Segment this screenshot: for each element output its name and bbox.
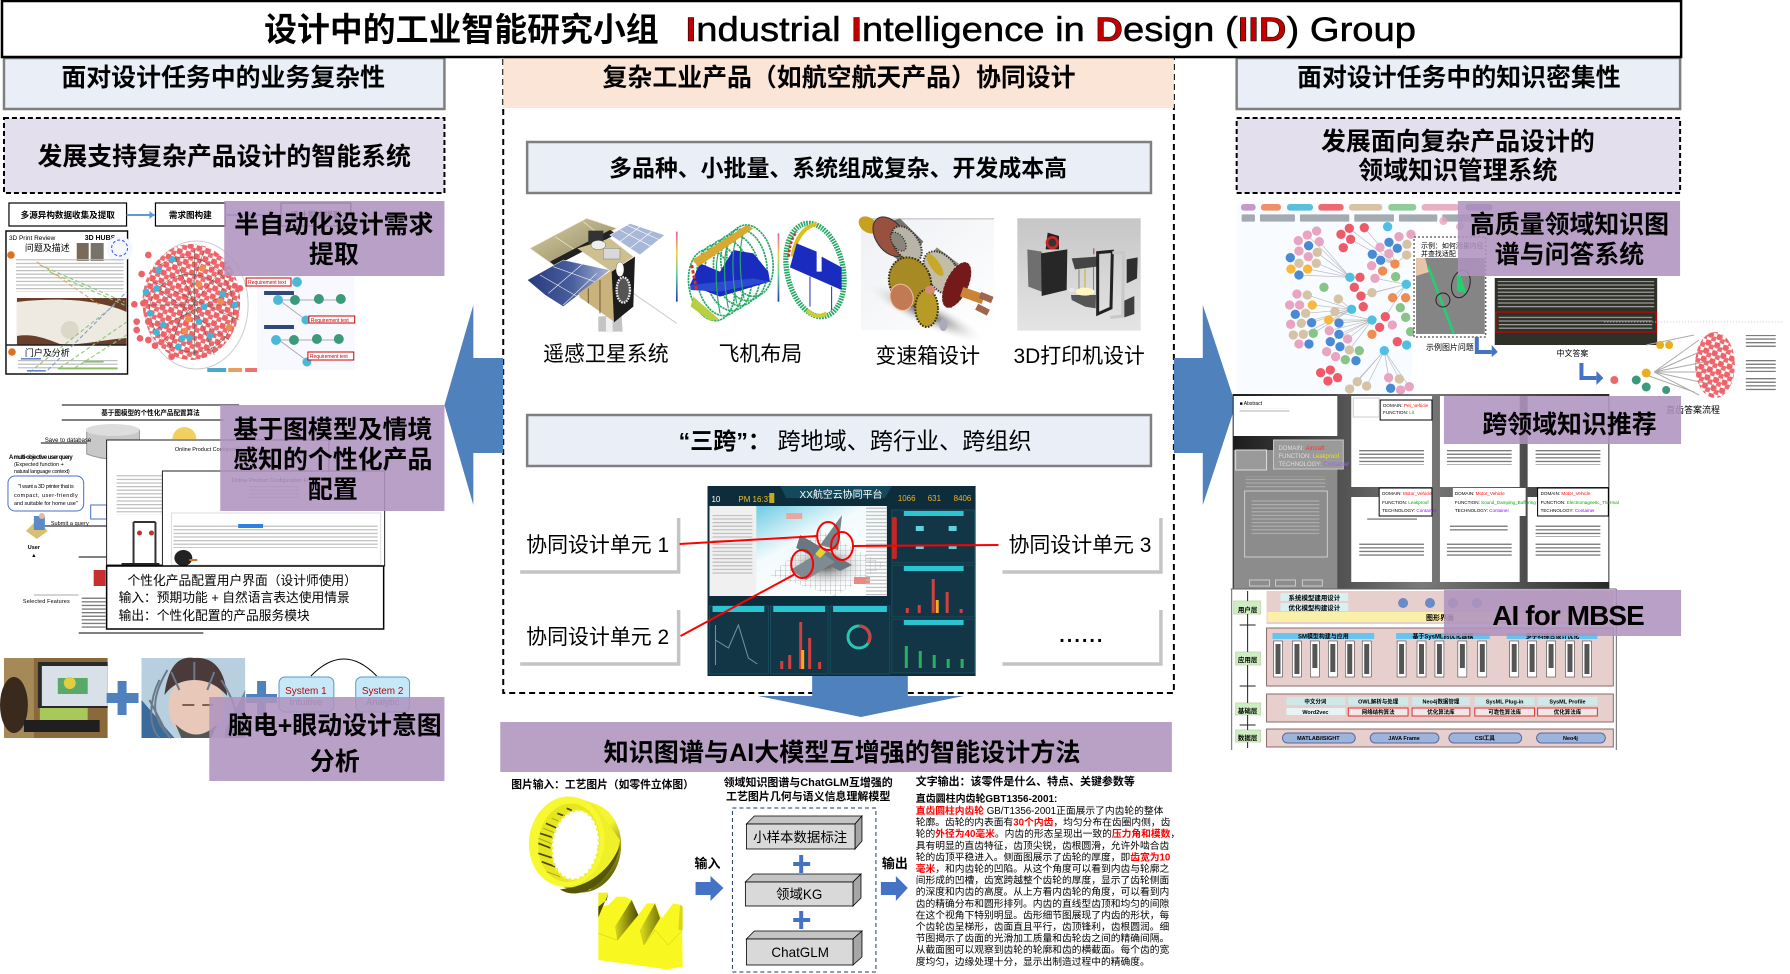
figure: graph-based configuration algorithm: and suitable for home use" — [14, 501, 78, 507]
layer: platform services: Word2vec — [1302, 710, 1328, 716]
caption: KG and ChatGLM model: 领域知识图谱与ChatGLM互增强的 — [724, 775, 893, 789]
captions: product examples: 遥感卫星系统 — [543, 343, 669, 366]
figure: requirement extraction flow: 多源异构数据收集及提取 — [21, 209, 115, 220]
block: domain KG — [745, 874, 861, 906]
layer: interface: 系统模型建用设计 — [1289, 593, 1341, 602]
arrow: output: 输出 — [882, 856, 908, 871]
arrow: answer to recommendation — [1581, 363, 1603, 385]
photo: EEG cap — [142, 658, 245, 738]
box: three-cross collaboration: “三跨”： 跨地域、跨行业、跨组织 — [679, 428, 1032, 454]
dashboard: collaboration platform: 1066 — [898, 494, 916, 503]
panel: center dashed frame — [503, 57, 1174, 693]
icon: plus — [246, 681, 277, 715]
figure: graph-based configuration algorithm — [8, 405, 239, 633]
overlay label: EEG and eye tracking intent analysis: 脑电+眼动设计意图 — [228, 711, 442, 740]
figure: graph-based configuration algorithm: Selected Features — [23, 599, 70, 605]
panel: LLM answer — [1495, 278, 1657, 358]
title: 设计中的工业智能研究小组 — [264, 11, 659, 48]
overlay label: graph and context-aware configuration — [220, 405, 444, 511]
chart: fan knowledge graph: 直齿答案流程 — [1666, 404, 1720, 415]
screen: left grey slide: ■ Abstract — [1240, 401, 1263, 407]
callouts: domain function technology tags: DOMAIN: Motor_Vehicle — [1455, 491, 1505, 496]
box: three-cross collaboration — [527, 415, 1151, 466]
box: product characteristics: 多品种、小批量、系统组成复杂、开发成本高 — [609, 155, 1067, 181]
screenshot: online product configurator back window: Online Product Configuration Form — [175, 447, 260, 453]
callout lines and circles on aircraft — [680, 522, 998, 636]
diagram: dual system: Intuitive — [290, 697, 322, 708]
layer: platform services: 网络结构算法 — [1362, 708, 1395, 716]
arrow down to methods — [758, 676, 964, 717]
diagram: MBSE architecture: 基础层 — [1238, 706, 1258, 715]
text block: generated description: 轮的外径为40毫米。内齿的形态呈现出一致的压力角和模数， — [916, 827, 1180, 840]
icon: 3D printer — [1017, 218, 1141, 331]
heading: left task complexity — [4, 58, 444, 109]
figure: requirement extraction flow: 问题及描述 — [25, 242, 70, 253]
layer: application: 基于SysML的优化建模 — [1412, 632, 1473, 641]
icon: plus — [107, 681, 139, 715]
heading: left task complexity: 面对设计任务中的业务复杂性 — [61, 64, 385, 92]
text block: generated description: 轮廓。齿轮的内表面有30个内齿，均匀分布在齿圈内侧，齿 — [916, 816, 1171, 829]
block: ChatGLM — [746, 931, 862, 965]
chart: domain knowledge graph — [1237, 203, 1492, 395]
panel: model stack — [732, 808, 876, 972]
arrow: input: 输入 — [695, 856, 720, 871]
layer: platform services — [1267, 694, 1613, 722]
text block: generated description: 在这个视角下特别明显。齿形细节图展现了内齿的形状，每 — [916, 908, 1169, 921]
heading: right knowledge intensity — [1237, 58, 1680, 109]
callouts: domain function technology tags: TECHNOLOGY: Container — [1541, 508, 1595, 513]
arrow: input — [695, 856, 723, 901]
heading: right knowledge intensity: 面对设计任务中的知识密集性 — [1297, 63, 1621, 92]
overlay label: knowledge graph and QA system: 谱与问答系统 — [1495, 241, 1644, 269]
diagram: dual system: System 1 — [285, 686, 327, 697]
diagram: MBSE architecture: 用户层 — [1238, 605, 1258, 614]
figure: requirement extraction flow: 3D HUBS — [85, 235, 116, 242]
unit: collaborative design unit 2 — [519, 610, 681, 666]
text block: generated description: 间形成的凹槽，齿宽跨越整个齿轮的厚度，显示了齿轮侧面 — [916, 874, 1169, 887]
overlay label: AI for MBSE — [1444, 590, 1681, 636]
screen: left grey slide: FUNCTION: Leakproof — [1279, 454, 1339, 460]
chart: requirement sub-graphs: Requirement text — [248, 280, 287, 286]
caption: KG and ChatGLM model — [724, 775, 893, 803]
layer: interface — [1267, 591, 1613, 624]
text block: generated description: 齿的精确分布和圆形排列。内齿的直线型齿顶和均匀的间隙 — [916, 897, 1169, 910]
figure: graph-based configuration algorithm: A multi-objective user query — [9, 455, 73, 461]
overlay label: knowledge graph and QA system: 高质量领域知识图 — [1470, 211, 1669, 239]
callouts: domain function technology tags: DOMAIN: Pet_Vehicle — [1383, 403, 1429, 408]
callouts: domain function technology tags: DOMAIN: Motor_Vehicle — [1382, 491, 1432, 496]
caption: image input: 图片输入：工艺图片（如零件立体图） — [511, 778, 694, 791]
overlay label: semi-automatic requirement extraction — [224, 201, 444, 276]
icon: gearbox — [855, 211, 994, 354]
layer: application: 多学科综合设计优化 — [1526, 632, 1579, 641]
text block: generated description: 轮的齿顶平稳进入。侧面图展示了齿轮的厚度，即齿宽为10 — [916, 850, 1171, 863]
dashboard: collaboration platform: XX航空云协同平台 — [800, 488, 883, 501]
heading: center collaborative design — [503, 57, 1174, 108]
figure: graph-based configuration algorithm: compact, user-friendly — [14, 493, 78, 499]
layer: application — [1267, 628, 1613, 686]
chart: requirement sub-graphs: Requirement text — [310, 354, 348, 360]
text block: generated description: 毫米，和内齿轮的凹陷。从这个角度可以看到内齿与轮廓之 — [916, 862, 1169, 875]
callouts: domain function technology tags: FUNCTION: Lit — [1383, 410, 1415, 415]
captions: product examples: 3D打印机设计 — [1014, 345, 1145, 368]
heading: center collaborative design: 复杂工业产品（如航空航天产品）协同设计 — [603, 64, 1076, 92]
unit: more units: ...... — [1059, 625, 1104, 647]
icon: yellow internal gear — [523, 792, 627, 897]
callouts: domain function technology tags: TECHNOLOGY: Container — [1455, 508, 1509, 513]
panel: left intelligent systems goal — [4, 118, 444, 193]
unit: collaborative design unit 2: 协同设计单元 2 — [526, 626, 669, 649]
figure: graph-based configuration algorithm: Save to database — [45, 438, 92, 444]
panel: right knowledge management goal — [1237, 118, 1680, 193]
block: small-sample annotation: 小样本数据标注 — [753, 830, 847, 845]
screenshot: online product configurator front window: Online Product Configuration Form — [232, 478, 317, 484]
heading: KG and LLM method: 知识图谱与AI大模型互增强的智能设计方法 — [604, 738, 1080, 767]
caption box: configuration interface — [107, 566, 384, 629]
title: Industrial Intelligence in Design ( IID) Group — [686, 11, 1416, 49]
icon: plus — [793, 911, 810, 929]
diagram: dual system — [279, 659, 410, 712]
text block: generated description: 的深度和内齿的高度。从上方看内齿轮的角度，可以看到内 — [916, 885, 1169, 898]
layer: data and tools: MATLAB/ISIGHT — [1297, 736, 1340, 742]
layer: interface: 优化模型构建设计 — [1289, 603, 1341, 612]
layer: platform services: 优化算法库 — [1554, 708, 1582, 716]
screenshot: online product configurator back window — [107, 440, 329, 565]
figure: graph-based configuration algorithm: "I want a 3D printer that is — [18, 484, 74, 490]
box: product characteristics — [527, 142, 1151, 193]
text block: generated description: 具有明显的直齿特征，齿顶尖锐，齿根圆滑，允许外啮合齿 — [916, 839, 1169, 852]
chart: requirement sub-graphs: Requirement text — [311, 318, 349, 324]
screen: left grey slide: TECHNOLOGY: Container — [1279, 462, 1349, 468]
screen: left grey slide: DOMAIN: Aircraft — [1279, 446, 1325, 452]
dashboard: collaboration platform: 8406 — [954, 494, 972, 503]
text block: generated description: 从截面图可以观察到齿轮的轮廓和齿的横截面。每个齿的宽 — [916, 943, 1169, 956]
diagram: dual system: System 2 — [362, 686, 404, 697]
layer: platform services: OWL解析与处理 — [1358, 697, 1399, 706]
figure: graph-based configuration algorithm: natural language context) — [14, 469, 70, 475]
overlay label: knowledge graph and QA system — [1458, 201, 1680, 276]
callouts: domain function technology tags: FUNCTION: Electromagnetic_Thermal — [1541, 500, 1619, 505]
text block: generated description: 直齿圆柱内齿轮 GB/T1356-2001正面展示了内齿轮的整体 — [916, 804, 1164, 817]
panel: right knowledge management goal: 领域知识管理系统 — [1358, 157, 1558, 185]
chart: requirement knowledge graph — [131, 241, 257, 372]
screenshot: online product configurator front window — [162, 471, 385, 566]
figure: query photo: 并查找适配 — [1421, 249, 1456, 258]
figure: requirement extraction flow: 设计需求提取 — [290, 209, 342, 220]
overlay label: graph and context-aware configuration: 感知的个性化产品 — [233, 445, 432, 474]
left arrow — [444, 305, 503, 505]
layer: data and tools — [1267, 729, 1613, 747]
dashboard: collaboration platform — [708, 486, 976, 676]
chart: requirement sub-graphs — [246, 272, 355, 370]
dashboard: collaboration platform: PM 16:37 — [738, 495, 773, 504]
text block: generated description — [916, 774, 1180, 968]
unit: collaborative design unit 3 — [1001, 518, 1163, 574]
figure: graph-based configuration algorithm: (Expected function + — [14, 462, 64, 468]
unit: collaborative design unit 1: 协同设计单元 1 — [526, 534, 669, 557]
layer: interface: 图形界面 — [1426, 613, 1454, 622]
diagram: MBSE architecture: 应用层 — [1238, 655, 1258, 664]
figure: requirement extraction flow: 门户及分析 — [25, 347, 70, 358]
caption box: configuration interface: 输入：预期功能 + 自然语言表达使用情景 — [119, 590, 350, 605]
overlay label: EEG and eye tracking intent analysis — [209, 697, 444, 781]
callouts: domain function technology tags: TECHNOLOGY: Container — [1382, 508, 1437, 513]
text block: generated description: 直齿圆柱内齿轮GBT1356-2001: — [916, 792, 1057, 805]
caption box: configuration interface: 个性化产品配置用户界面（设计师使用） — [128, 573, 357, 588]
text block: generated description: 节图揭示了齿面的光滑加工质量和齿轮齿之间的精确间隔。 — [916, 932, 1169, 945]
panel: right knowledge management goal: 发展面向复杂产品设计的 — [1321, 128, 1595, 156]
arrow: graph to answer — [1477, 337, 1498, 357]
icon: plus — [793, 855, 810, 873]
screen: result pages — [1351, 396, 1608, 582]
title — [2, 1, 1681, 57]
caption box: configuration interface: 输出：个性化配置的产品服务模块 — [119, 608, 310, 623]
layer: application: SM模型构建与应用 — [1298, 632, 1349, 641]
layer: platform services: 优化算法库 — [1427, 708, 1455, 716]
panel: cross-domain recommendation screens — [1233, 394, 1619, 589]
panel: left intelligent systems goal: 发展支持复杂产品设计的智能系统 — [38, 143, 411, 171]
captions: product examples: 飞机布局 — [718, 343, 802, 366]
callouts: domain function technology tags: FUNCTION: Leakproof — [1382, 500, 1429, 505]
overlay label: graph and context-aware configuration: 配置 — [308, 476, 358, 504]
figure: requirement extraction flow — [6, 203, 351, 374]
overlay label: cross-domain knowledge recommendation — [1444, 396, 1681, 444]
layer: data and tools: CSI工具 — [1475, 735, 1495, 742]
overlay label: AI for MBSE: AI for MBSE — [1492, 600, 1645, 631]
unit: more units — [1001, 610, 1163, 666]
dashboard: collaboration platform: 10 — [712, 495, 721, 504]
right arrow — [1174, 305, 1236, 505]
overlay label: cross-domain knowledge recommendation: 跨领域知识推荐 — [1482, 411, 1657, 439]
icon: aircraft structure simulation — [676, 218, 852, 324]
figure: requirement extraction flow: 需求图构建 — [169, 209, 212, 220]
unit: collaborative design unit 1 — [519, 518, 681, 574]
captions: product examples — [543, 343, 1145, 368]
figure: graph-based configuration algorithm: User — [28, 545, 41, 551]
block: domain KG: 领域KG — [776, 887, 822, 902]
overlay label: semi-automatic requirement extraction: 提取 — [309, 241, 359, 269]
figure: query photo: 示例图片问题 — [1426, 342, 1474, 352]
chart: fan knowledge graph — [1604, 322, 1784, 415]
diagram: MBSE architecture — [1231, 589, 1616, 750]
overlay label: graph and context-aware configuration: 基于图模型及情境 — [233, 416, 432, 444]
layer: platform services: Neo4j数据管理 — [1423, 697, 1460, 706]
layer: platform services: 中文分词 — [1304, 697, 1327, 706]
block: small-sample annotation — [746, 816, 862, 849]
figure: query photo — [1414, 237, 1486, 352]
text block: generated description: 个齿轮齿呈梯形，齿面直且平行，齿顶锋利，齿根圆润。细 — [916, 920, 1169, 933]
arrow: output — [881, 856, 908, 901]
photo: eye tracking setup — [0, 658, 108, 738]
dashboard: collaboration platform: 631 — [928, 494, 942, 503]
icon: satellite — [527, 218, 677, 333]
screen: left grey slide — [1234, 396, 1349, 589]
panel: LLM answer: 中文答案 — [1557, 348, 1588, 358]
overlay label: semi-automatic requirement extraction: 半自动化设计需求 — [234, 211, 433, 239]
callouts: domain function technology tags: FUNCTION: Sound_Damping_Buffering — [1455, 500, 1536, 505]
layer: platform services: SysML Profile — [1549, 699, 1586, 706]
layer: data and tools: JAVA Frame — [1388, 736, 1420, 742]
overlay label: EEG and eye tracking intent analysis: 分析 — [310, 748, 360, 776]
heading: KG and LLM method — [500, 722, 1172, 772]
callouts: domain function technology tags — [1353, 398, 1619, 516]
figure: graph-based configuration algorithm: ▲ — [31, 553, 37, 559]
text block: generated description: 度均匀，边缘处理十分，显示出制造过程中的精确度。 — [916, 955, 1150, 968]
figure: requirement extraction flow: 3D Print Review — [9, 235, 56, 242]
layer: platform services: SysML Plug-in — [1486, 699, 1524, 706]
layer: platform services: 可靠性算法库 — [1488, 708, 1522, 716]
block: ChatGLM: ChatGLM — [771, 945, 829, 960]
figure: graph-based configuration algorithm: Submit a query — [51, 521, 89, 527]
layer: data and tools: Neo4j — [1563, 736, 1578, 742]
icon: yellow gear teeth detail — [598, 893, 683, 969]
figure: graph-based configuration algorithm: 基于图模型的个性化产品配置算法 — [101, 408, 200, 417]
figure: query photo: 示例：如何测量内径 — [1421, 241, 1484, 250]
captions: product examples: 变速箱设计 — [875, 345, 980, 368]
diagram: MBSE architecture: 数据层 — [1238, 733, 1258, 742]
callouts: domain function technology tags: DOMAIN: Motor_Vehicle — [1541, 491, 1591, 496]
diagram: dual system: Analytic — [366, 697, 399, 708]
text block: generated description: 文字输出：该零件是什么、特点、关键参数等 — [916, 774, 1135, 788]
unit: collaborative design unit 3: 协同设计单元 3 — [1008, 534, 1151, 557]
caption: KG and ChatGLM model: 工艺图片几何与语义信息理解模型 — [726, 789, 890, 803]
